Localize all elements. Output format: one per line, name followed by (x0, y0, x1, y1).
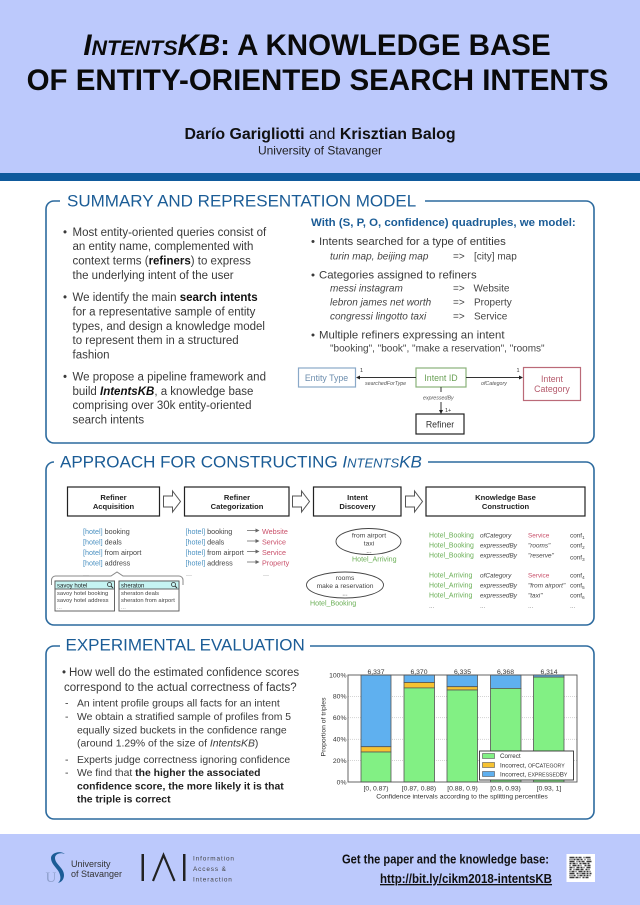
text block: quadruples model: • (311, 270, 315, 282)
logo: IAI: Interaction (193, 876, 233, 884)
knowledge base triples table: ... (480, 603, 486, 610)
knowledge base triples table: Hotel_Booking (429, 552, 474, 560)
text block: summary bullets: build IntentsKB, a knowledge base (72, 386, 253, 398)
authors: Darío Garigliotti and Krisztian Balog (184, 126, 456, 143)
text block: quadruples model: => (453, 312, 465, 322)
call to action: http://bit.ly/cikm2018-intentsKB (380, 871, 552, 886)
knowledge base triples table: conf (570, 582, 582, 590)
knowledge base triples table: 3 (582, 557, 585, 562)
knowledge base triples table: Hotel_Arriving (429, 582, 472, 590)
search box: sheraton: sheraton from airport (121, 598, 175, 604)
text block: quadruples model: => (453, 298, 465, 308)
y axis ticks: 0% (337, 780, 346, 786)
text block: summary bullets: • (63, 227, 67, 239)
search box: savoy hotel (55, 581, 114, 611)
knowledge base triples table: 1 (582, 535, 585, 540)
affiliation: University of Stavanger (258, 144, 382, 158)
text block: evaluation findings: How well do the estimated confidence scores (69, 667, 299, 679)
text block: evaluation findings: equally sized buckets in the confidence range (77, 726, 287, 736)
knowledge base triples table: conf (570, 532, 582, 540)
text block: summary bullets: types, and design a knowledge model (72, 321, 265, 333)
entity type box: Entity Type (305, 373, 348, 383)
text block: evaluation findings: the triple is correct (77, 794, 171, 806)
text block: summary bullets: for a representative sample of entity (72, 306, 256, 318)
text block: evaluation findings: - (65, 698, 68, 710)
text block: quadruples model: Property (474, 298, 512, 308)
search suggestion bracket (52, 572, 183, 585)
knowledge base triples table: expressedBy (480, 592, 518, 600)
category arrows (247, 528, 260, 564)
text block: quadruples model: • (311, 330, 315, 342)
refiner categorization list: ... (263, 569, 269, 578)
text block: evaluation findings: Experts judge correctness ignoring confidence (77, 755, 290, 766)
refiner acquisition list: ... (83, 569, 89, 578)
text block: summary bullets: search intents (72, 414, 144, 426)
logo: IAI (142, 854, 235, 884)
refiner categorization list: [hotel] address (186, 558, 233, 568)
search box: savoy hotel: ... (57, 605, 62, 611)
text block: summary bullets: an entity name, complemented with (72, 241, 253, 253)
y axis ticks: 40% (333, 736, 346, 744)
title (27, 29, 608, 97)
knowledge base triples table: Hotel_Arriving (429, 572, 472, 580)
pipeline step boxes: Refiner (100, 493, 127, 502)
knowledge base triples table: Hotel_Arriving (429, 592, 472, 600)
intent cluster: hotel arriving (336, 528, 401, 564)
connectors (356, 376, 523, 414)
bar 1 (361, 675, 391, 782)
call to action: Get the paper and the knowledge base: (342, 852, 549, 866)
text block: summary bullets: Most entity-oriented queries consist of (72, 227, 267, 239)
bar 5 (534, 675, 564, 782)
knowledge base triples table: 5 (582, 585, 585, 590)
intent category box (524, 368, 580, 400)
bar 3 (447, 675, 478, 782)
search box: savoy hotel: savoy hotel booking (57, 591, 108, 597)
panel: summary and representation model (46, 192, 594, 443)
refiner categorization list: Service (262, 548, 286, 557)
bar chart: proportion of triples (320, 669, 577, 800)
text block: quadruples model: Website (474, 284, 510, 294)
text block: quadruples model: • (311, 236, 315, 248)
knowledge base triples table: ... (429, 603, 435, 610)
knowledge base triples table: conf (570, 542, 582, 550)
knowledge base triples table: Hotel_Booking (429, 532, 474, 540)
diagram: knowledge model: 1 (360, 368, 363, 374)
text block: evaluation findings: correspond to the actual correctness of facts? (64, 682, 297, 694)
knowledge base triples table: Service (528, 572, 550, 580)
pipeline step boxes (68, 487, 585, 516)
knowledge base triples table: expressedBy (480, 582, 518, 590)
refiner acquisition list (83, 527, 141, 578)
text block: evaluation findings: - (65, 755, 68, 766)
knowledge base triples table: conf (570, 572, 582, 580)
text block: quadruples model (311, 217, 576, 354)
logo: IAI: Access & (193, 866, 227, 873)
text block: quadruples model: Intents searched for a type of entities (319, 236, 506, 248)
text block: quadruples model: messi instagram (330, 284, 403, 294)
bar 2 (404, 675, 434, 782)
text block: summary bullets: to represent them in a structured (72, 335, 239, 347)
text block: evaluation findings (62, 667, 299, 806)
text block: quadruples model: Service (474, 312, 508, 322)
text block: summary bullets: comprising over 30k entity-oriented (72, 400, 251, 412)
legend: Incorrect, OFCATEGORY (500, 762, 565, 770)
y axis ticks: 100% (329, 672, 346, 680)
logo: IAI: Information (193, 856, 235, 862)
refiner categorization list: Website (262, 527, 288, 536)
intent cluster: hotel booking: Hotel_Booking (310, 600, 356, 608)
logo: University of Stavanger (46, 852, 122, 886)
legend: Incorrect, EXPRESSEDBY (500, 772, 568, 778)
text block: quadruples model: Multiple refiners expressing an intent (319, 330, 505, 342)
knowledge base triples table: ofCategory (480, 532, 512, 540)
x axis ticks: [0, 0.87) (364, 786, 388, 792)
pipeline arrows (164, 491, 422, 512)
intent id box: Intent ID (424, 373, 458, 383)
knowledge base triples table: expressedBy (480, 542, 518, 550)
intent cluster: hotel arriving: Hotel_Arriving (352, 556, 397, 564)
logo: University of Stavanger: University (71, 859, 111, 869)
call to action (342, 852, 552, 886)
bar count labels: 6,314 (540, 669, 558, 676)
refiner acquisition list: [hotel] deals (83, 538, 122, 546)
legend: Correct (500, 753, 521, 760)
legend (480, 751, 574, 780)
text block: summary bullets: context terms (refiners) to express (72, 256, 251, 268)
header band (0, 0, 640, 181)
refiner acquisition list: [hotel] booking (83, 527, 130, 536)
connector labels: expressedBy (423, 396, 454, 402)
bar count labels (367, 669, 558, 676)
knowledge base triples table: Service (528, 532, 550, 540)
connector labels (365, 381, 507, 402)
text block: evaluation findings: An intent profile groups all facts for an intent (77, 698, 280, 710)
knowledge base triples table: ofCategory (480, 572, 512, 580)
text block: quadruples model: lebron james net worth (330, 298, 432, 308)
intent cluster: hotel booking: rooms (336, 575, 355, 582)
gridlines (348, 696, 577, 761)
search box: sheraton: sheraton deals (121, 591, 159, 597)
pipeline step boxes: Construction (482, 502, 529, 511)
knowledge base triples table: ... (528, 603, 534, 610)
text block: quadruples model: With (S, P, O, confidence) quadruples, we model: (311, 217, 576, 229)
knowledge base triples table: Hotel_Booking (429, 542, 474, 550)
footer band (0, 834, 640, 905)
knowledge base triples table: "rooms" (528, 542, 551, 550)
diagram: knowledge model: 1+ (445, 408, 451, 414)
text block: quadruples model: congressi lingotto taxi (330, 312, 427, 322)
refiner categorization list: Property (262, 558, 290, 568)
logo: University of Stavanger: U (46, 870, 56, 886)
text block: evaluation findings: We obtain a stratified sample of profiles from 5 (77, 712, 291, 723)
pipeline step boxes: Intent (347, 493, 368, 502)
knowledge base triples table: expressedBy (480, 552, 518, 560)
refiner box: Refiner (426, 420, 454, 430)
bar count labels: 6,368 (497, 669, 514, 676)
x axis ticks (364, 786, 561, 792)
diagram: knowledge model: 1 (516, 368, 520, 374)
entity type box (298, 368, 356, 387)
refiner categorization list: [hotel] from airport (186, 548, 244, 557)
knowledge base triples table: 2 (582, 545, 585, 550)
text block: quadruples model: => (453, 284, 465, 294)
pipeline step boxes: Acquisition (93, 502, 135, 511)
text block: quadruples model: [city] map (474, 252, 517, 262)
text block: quadruples model: turin map, beijing map (330, 252, 429, 262)
text block: evaluation findings: We find that the higher the associated (77, 768, 260, 779)
text block: summary bullets: • (63, 372, 67, 384)
y axis title: Proportion of triples (320, 697, 328, 756)
search box: savoy hotel: savoy hotel address (57, 598, 109, 604)
intent cluster: hotel booking (306, 572, 384, 608)
text block: evaluation findings: • (62, 667, 66, 679)
heading: evaluation: EXPERIMENTAL EVALUATION (66, 636, 305, 654)
intent cluster: hotel booking: ... (342, 590, 348, 598)
text block: evaluation findings: - (65, 712, 68, 723)
refiner acquisition list: [hotel] address (83, 558, 131, 568)
refiner categorization list (186, 527, 290, 578)
refiner categorization list: [hotel] deals (186, 538, 225, 546)
intent cluster: hotel booking: make a reservation (317, 583, 374, 590)
logo: University of Stavanger: of Stavanger (71, 869, 122, 879)
text block: evaluation findings: confidence score, the more likely it is that (77, 782, 284, 792)
plot frame (348, 675, 577, 782)
search box: sheraton (119, 581, 179, 611)
y axis ticks: 20% (333, 758, 346, 765)
refiner box (416, 414, 464, 434)
text block: quadruples model: Categories assigned to refiners (319, 270, 477, 282)
knowledge base triples table: ... (570, 603, 576, 610)
connector labels: ofCategory (481, 381, 507, 387)
intent category box: Category (534, 384, 570, 394)
y axis ticks: 60% (333, 715, 346, 722)
heading: summary: SUMMARY AND REPRESENTATION MODEL (67, 192, 416, 210)
intent cluster: hotel arriving: from airport (352, 532, 386, 540)
text block: summary bullets (63, 227, 267, 426)
text block: summary bullets: We propose a pipeline framework and (72, 372, 266, 384)
y axis ticks (329, 672, 346, 786)
diagram: knowledge model (298, 368, 580, 434)
title: INTENTSKB: A KNOWLEDGE BASE (83, 29, 551, 62)
pipeline step boxes: Discovery (339, 502, 376, 511)
knowledge base triples table: "from airport" (528, 582, 566, 590)
pipeline step boxes: Knowledge Base (475, 493, 536, 502)
connector labels: searchedForType (365, 381, 406, 387)
refiner categorization list: [hotel] booking (186, 527, 232, 536)
knowledge base triples table: "reserve" (528, 552, 555, 560)
text block: summary bullets: fashion (72, 350, 110, 362)
knowledge base triples table: 6 (582, 595, 585, 600)
panel: approach (46, 452, 594, 625)
bar 4 (490, 675, 521, 782)
refiner categorization list: ... (186, 569, 192, 578)
x axis ticks: [0.87, 0.88) (402, 786, 436, 792)
x axis ticks: [0.88, 0.9) (447, 786, 478, 792)
text block: summary bullets: We identify the main search intents (72, 292, 258, 304)
bar count labels: 6,335 (454, 669, 471, 676)
text block: evaluation findings: (around 1.29% of the size of IntentsKB) (77, 738, 258, 750)
knowledge base triples table: 4 (582, 575, 585, 580)
pipeline step boxes: Categorization (211, 502, 264, 511)
intent id box (416, 368, 466, 387)
bar count labels: 6,370 (410, 669, 428, 676)
heading: approach: APPROACH FOR CONSTRUCTING INTENTSKB (60, 452, 422, 472)
pipeline step boxes: Refiner (224, 493, 250, 502)
knowledge base triples table: conf (570, 592, 582, 600)
knowledge base triples table (429, 532, 585, 610)
x axis ticks: [0.93, 1] (537, 786, 561, 792)
intent cluster: hotel arriving: ... (366, 548, 372, 555)
refiner acquisition list: [hotel] from airport (83, 548, 141, 557)
text block: summary bullets: the underlying intent of the user (72, 270, 234, 282)
text block: summary bullets: • (63, 292, 67, 304)
refiner categorization list: Service (262, 538, 286, 546)
search box: sheraton: sheraton (121, 584, 144, 590)
intent cluster: hotel arriving: taxi (364, 540, 375, 548)
x axis ticks: [0.9, 0.93) (490, 786, 521, 792)
knowledge base triples table: conf (570, 554, 582, 562)
title: OF ENTITY-ORIENTED SEARCH INTENTS (27, 64, 608, 97)
search box: savoy hotel: savoy hotel (57, 584, 87, 590)
x axis title: Confidence intervals according to the splitting percentiles (376, 794, 548, 800)
text block: quadruples model: => (453, 252, 465, 262)
text block: quadruples model: "booking", "book", "make a reservation", "rooms" (330, 344, 545, 354)
panel: experimental evaluation (46, 636, 594, 819)
QR code (566, 854, 595, 882)
y axis ticks: 80% (333, 694, 346, 700)
text block: evaluation findings: - (65, 768, 68, 779)
knowledge base triples table: "taxi" (528, 592, 543, 600)
bar count labels: 6,337 (367, 669, 385, 676)
intent category box: Intent (541, 374, 564, 384)
search box: sheraton: ... (121, 605, 126, 611)
